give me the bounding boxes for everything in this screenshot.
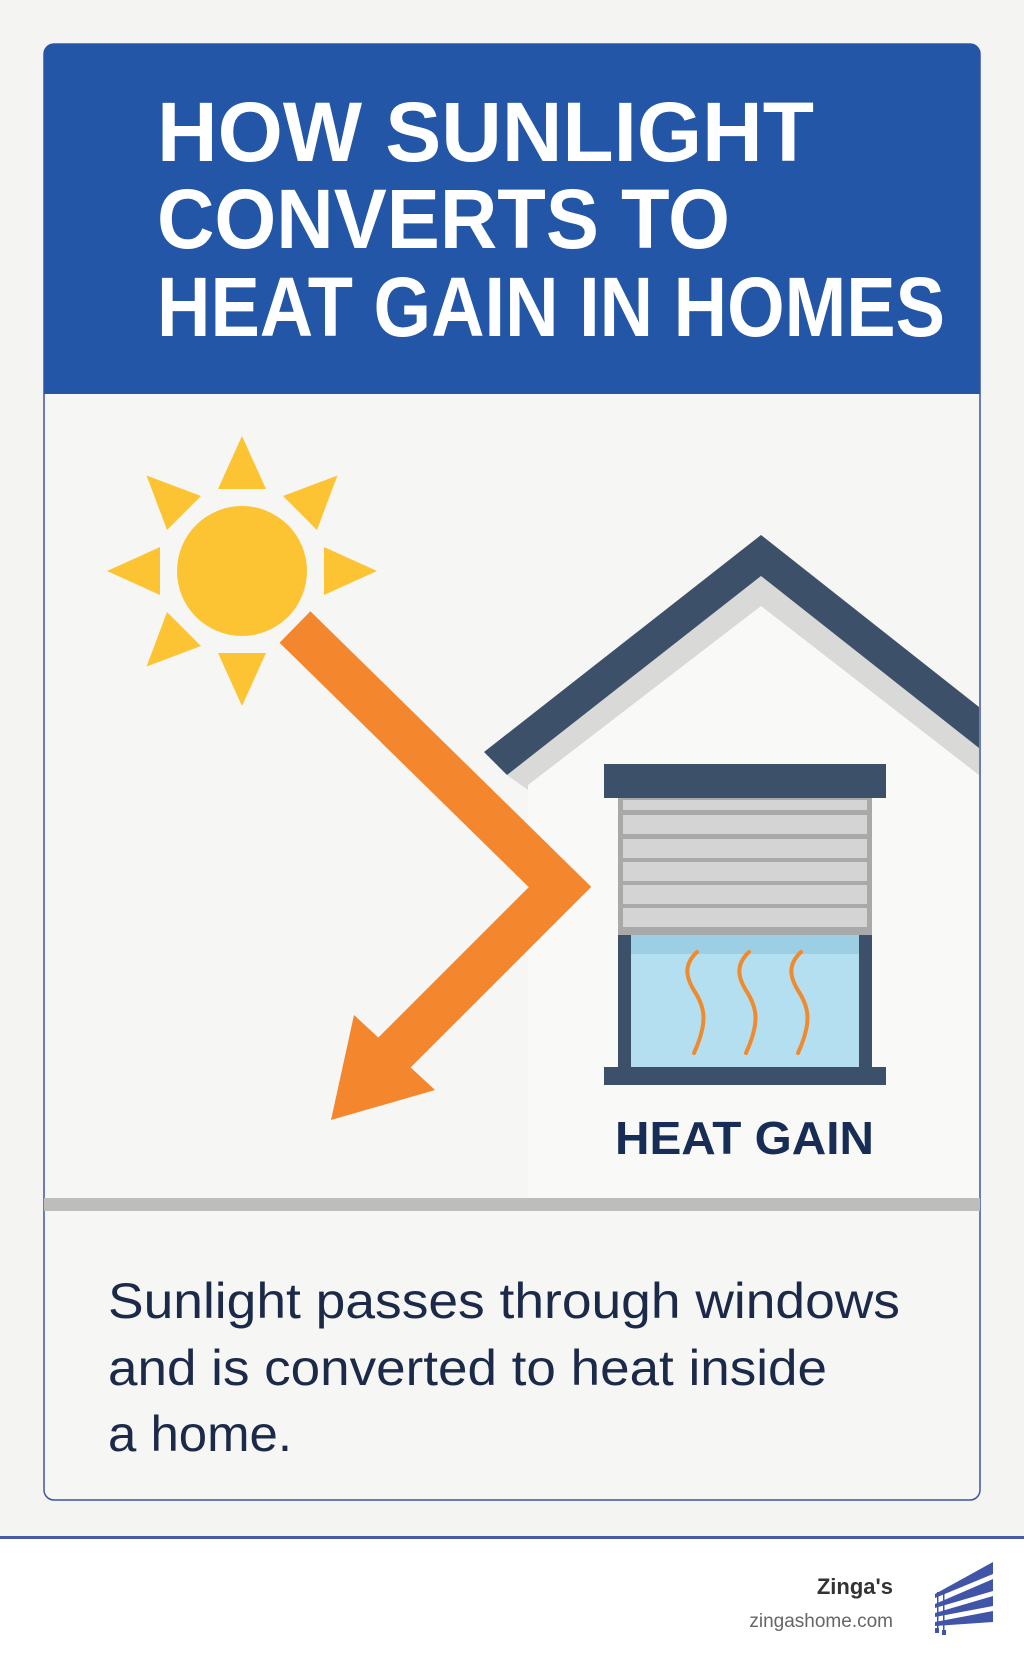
title: HOW SUNLIGHT xyxy=(157,85,814,179)
brand url: zingashome.com xyxy=(749,1611,893,1632)
header band xyxy=(44,44,980,394)
sill xyxy=(604,1067,886,1085)
house xyxy=(484,535,979,1198)
window with blinds xyxy=(604,764,886,1085)
title: CONVERTS TO xyxy=(157,172,730,266)
window frame and glass xyxy=(618,935,872,1075)
brand name: Zinga's xyxy=(817,1574,893,1599)
icon: blinds logo xyxy=(935,1562,993,1635)
description text: a home. xyxy=(108,1406,292,1462)
heat gain label: HEAT GAIN xyxy=(615,1112,874,1164)
house wall xyxy=(528,606,979,1198)
window top bar xyxy=(604,764,886,798)
ground line xyxy=(44,1198,980,1211)
title xyxy=(157,85,945,354)
arrow: sunlight reflecting xyxy=(295,627,560,1120)
roof xyxy=(484,535,979,775)
gray roof underside xyxy=(507,576,979,790)
icon: sun xyxy=(107,436,377,706)
footer xyxy=(0,1536,1024,1666)
panel: main card xyxy=(44,44,980,1500)
description text: Sunlight passes through windows xyxy=(108,1273,900,1329)
description text: and is converted to heat inside xyxy=(108,1340,827,1396)
description text xyxy=(108,1273,900,1462)
icon: heat waves xyxy=(687,952,808,1053)
blinds xyxy=(618,798,872,935)
